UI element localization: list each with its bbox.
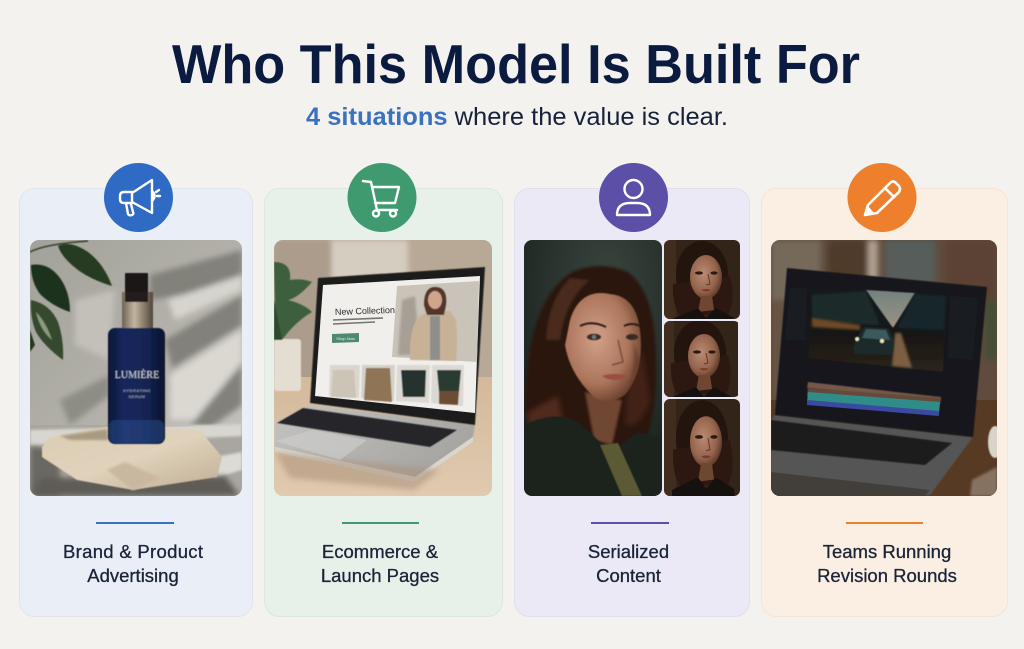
image: thumbnail 3 [664,399,740,496]
plant and pot [274,262,312,391]
image: laptop with store page: Shop Now [336,336,355,341]
preview frame [808,288,948,372]
icon: user [599,163,668,232]
laptop screen [310,267,485,425]
image: serum bottle on stone [30,240,242,496]
card label: Content [596,565,661,586]
accent line [591,522,669,524]
shirt [600,443,642,496]
hair back [525,266,656,450]
card label: Launch Pages [321,565,439,586]
laptop base [771,415,973,496]
hero image [392,281,479,362]
desk objects [987,425,997,459]
subtitle: 4 situations where the value is clear. [306,103,728,131]
product thumbnails [329,365,464,406]
card label: Ecommerce & [322,541,439,562]
panel: serialized content [514,163,750,616]
laptop base [275,405,475,477]
jacket [524,416,662,496]
panel: brand and product advertising [20,163,252,616]
card background [514,188,750,616]
hero copy: New Collection [335,305,395,317]
car [853,327,893,355]
accent line [96,522,174,524]
card label: Brand & Product [63,541,203,562]
bottle [108,273,165,444]
image: thumbnail 1 [664,240,740,319]
image: thumbnail 2 [664,321,738,397]
side panels [948,296,978,360]
icon: pencil [848,163,916,232]
card label: Teams Running [823,541,951,562]
bottle: SERUM [129,394,145,399]
timeline [807,382,941,402]
card label: Serialized [588,541,669,562]
icon: megaphone [104,163,173,232]
plant leaves [30,241,112,360]
panel: teams running revision rounds [762,163,1008,616]
image: laptop with video editor [771,240,1002,496]
bottle: LUMIÈRE [115,369,159,381]
icon: shopping cart [348,163,416,232]
face [565,293,641,401]
image: main portrait [524,240,662,496]
stone [42,427,222,490]
image: laptop with store page [274,240,492,496]
title: Who This Model Is Built For [172,33,860,95]
accent line [846,522,923,524]
card background [264,188,502,616]
neck [585,392,622,445]
facial features [580,323,640,380]
card background [762,188,1008,616]
shop button [332,333,359,343]
bottle: HYDRATING [123,388,151,393]
card background [20,188,252,616]
laptop screen [775,268,987,437]
accent line [342,522,419,524]
card label: Revision Rounds [817,565,957,586]
card label: Advertising [87,565,179,586]
panel: ecommerce and launch pages [264,163,502,616]
